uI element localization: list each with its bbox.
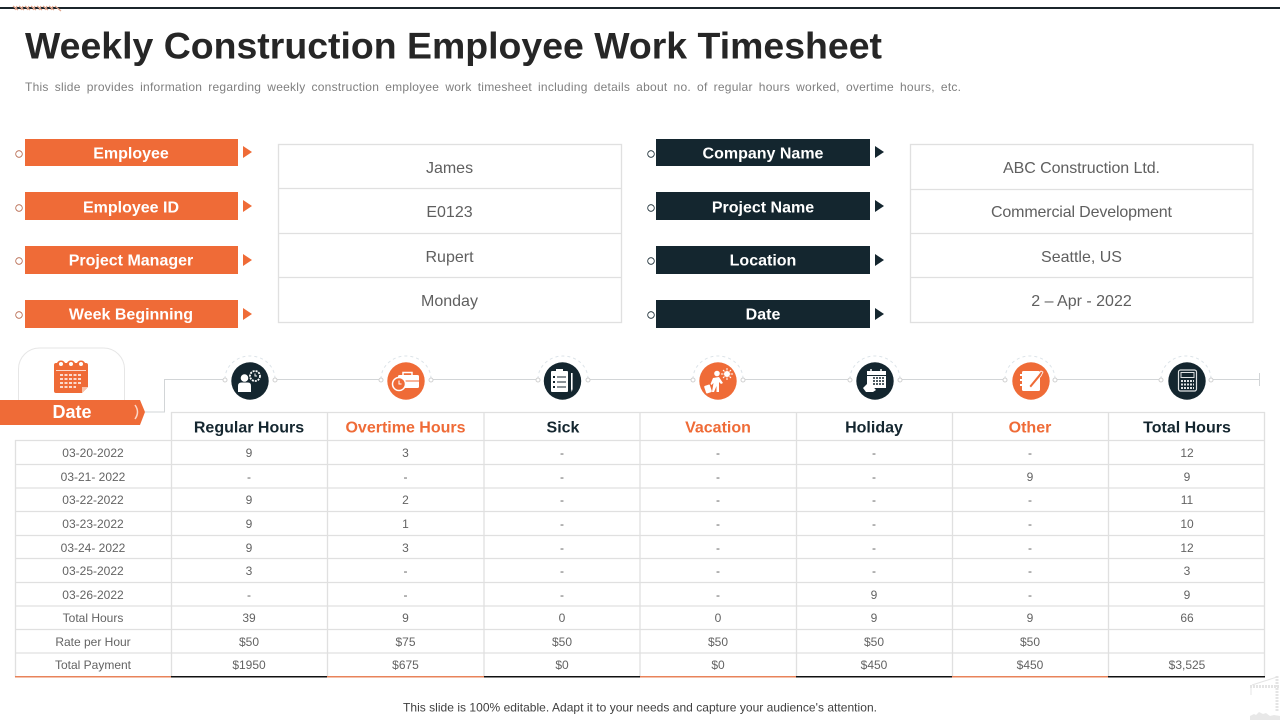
panel: company values: ABC Construction Ltd.: [1003, 160, 1160, 177]
row: 03-26-2022: [62, 588, 1191, 602]
row: 03-24-2022: -: [716, 541, 720, 555]
row: 03-26-2022: 9: [1184, 588, 1191, 602]
row: 03-26-2022: -: [1028, 588, 1032, 602]
label: Date: Date: [746, 306, 780, 324]
row: 03-21-2022: 03-21- 2022: [61, 470, 126, 484]
row: 03-25-2022: -: [716, 564, 720, 578]
row: 03-22-2022: 2: [402, 493, 409, 507]
row: 03-23-2022: -: [1028, 517, 1032, 531]
row: total payment: $450: [861, 658, 888, 672]
row: 03-20-2022: 9: [246, 446, 253, 460]
panel: company values: [910, 144, 1253, 322]
row: 03-25-2022: [62, 564, 1191, 578]
row: 03-23-2022: 10: [1180, 517, 1194, 531]
row: 03-21-2022: [61, 470, 1191, 484]
label: Company Name: [648, 139, 884, 166]
row: 03-26-2022: -: [560, 588, 564, 602]
row: 03-25-2022: -: [872, 564, 876, 578]
top rule: [0, 6, 1280, 11]
label: Location: Location: [730, 252, 796, 270]
row: rate per hour: $75: [395, 635, 416, 649]
row: rate per hour: $50: [239, 635, 259, 649]
row: total payment: $0: [555, 658, 569, 672]
row: 03-23-2022: -: [716, 517, 720, 531]
row: 03-23-2022: 03-23-2022: [62, 517, 124, 531]
column headers: [194, 420, 1231, 436]
row: total hours: 39: [242, 611, 256, 625]
row: 03-20-2022: 3: [402, 446, 409, 460]
row: 03-21-2022: -: [872, 470, 876, 484]
panel: employee values: James: [426, 160, 473, 177]
label: Company Name: Company Name: [703, 146, 824, 162]
row: 03-20-2022: [62, 446, 1194, 460]
column headers: Other: [1009, 420, 1051, 436]
row: 03-26-2022: -: [247, 588, 251, 602]
panel: employee labels: [16, 139, 252, 328]
row: 03-24-2022: 12: [1180, 541, 1194, 555]
label: Project Name: Project Name: [712, 200, 814, 216]
label: Employee: [16, 139, 252, 166]
row: 03-22-2022: -: [560, 493, 564, 507]
icon: crane watermark: [1250, 676, 1280, 720]
icon: regular hours: [223, 356, 277, 400]
row: rate per hour: Rate per Hour: [55, 635, 131, 649]
row: 03-23-2022: [62, 517, 1194, 531]
row: total hours: Total Hours: [63, 611, 123, 625]
row: 03-20-2022: -: [560, 446, 564, 460]
date banner: [0, 400, 145, 425]
label: Employee ID: Employee ID: [83, 200, 179, 216]
icon: vacation: [691, 356, 745, 400]
row: total payment: Total Payment: [55, 658, 132, 672]
row: total hours: 9: [1027, 611, 1034, 625]
label: Project Manager: Project Manager: [69, 252, 193, 270]
row: 03-21-2022: -: [560, 470, 564, 484]
row: 03-22-2022: -: [716, 493, 720, 507]
row: 03-22-2022: 11: [1181, 493, 1194, 507]
row: 03-21-2022: -: [247, 470, 251, 484]
panel: employee values: Monday: [421, 293, 478, 310]
row: 03-23-2022: -: [872, 517, 876, 531]
row: rate per hour: [55, 635, 1040, 649]
date tab card: [18, 348, 124, 402]
icon: calendar: [54, 361, 88, 393]
row: rate per hour: $50: [552, 635, 572, 649]
row: 03-26-2022: -: [716, 588, 720, 602]
row: total hours: 9: [402, 611, 409, 625]
row: 03-23-2022: -: [560, 517, 564, 531]
panel: company values: Seattle, US: [1041, 249, 1122, 266]
row: 03-21-2022: -: [404, 470, 408, 484]
row: 03-22-2022: 03-22-2022: [62, 493, 124, 507]
row: 03-22-2022: -: [872, 493, 876, 507]
column headers: Total Hours: [1143, 420, 1231, 436]
panel: employee values: [278, 144, 622, 322]
row: total payment: $450: [1017, 658, 1044, 672]
row: 03-24-2022: -: [1028, 541, 1032, 555]
subtitle: This slide provides information regarding weekly construction employee work timesheet including details about no. of regular hours worked, overtime hours, etc.: [25, 80, 961, 94]
icon: total hours: [1159, 356, 1213, 400]
label: Project Manager: [16, 246, 252, 274]
icon: overtime hours: [379, 356, 433, 400]
row: 03-24-2022: -: [872, 541, 876, 555]
panel: company labels: [648, 139, 884, 328]
column headers: Vacation: [685, 420, 751, 436]
title: Weekly Construction Employee Work Timesheet: [25, 26, 882, 66]
row: total hours: 0: [559, 611, 566, 625]
row: rate per hour: $50: [708, 635, 728, 649]
row: 03-24-2022: 3: [402, 541, 409, 555]
row: total hours: 9: [871, 611, 878, 625]
row: total payment: $0: [711, 658, 725, 672]
row: 03-24-2022: [61, 541, 1194, 555]
row: rate per hour: $50: [864, 635, 884, 649]
row: 03-21-2022: 9: [1027, 470, 1034, 484]
panel: company values: 2 – Apr - 2022: [1031, 293, 1132, 310]
row: 03-21-2022: 9: [1184, 470, 1191, 484]
column headers: Sick: [547, 420, 580, 436]
row: 03-23-2022: 1: [402, 517, 409, 531]
row: 03-22-2022: -: [1028, 493, 1032, 507]
row: 03-23-2022: 9: [246, 517, 253, 531]
connector line: [145, 373, 1260, 412]
label: Week Beginning: Week Beginning: [69, 306, 193, 324]
row: 03-21-2022: -: [716, 470, 720, 484]
column headers: Overtime Hours: [345, 420, 466, 436]
row: 03-25-2022: -: [404, 564, 408, 578]
panel: employee values: Rupert: [425, 249, 474, 266]
row: 03-22-2022: 9: [246, 493, 253, 507]
column headers: Regular Hours: [194, 420, 304, 436]
row: 03-25-2022: -: [1028, 564, 1032, 578]
row: total payment: [55, 658, 1206, 672]
row: 03-20-2022: -: [872, 446, 876, 460]
row: total payment: $3,525: [1169, 658, 1206, 672]
row: 03-26-2022: 9: [871, 588, 878, 602]
icon: other: [1003, 356, 1057, 400]
label: Location: [648, 246, 884, 274]
icon: holiday: [848, 356, 902, 400]
table bottom accents: [15, 676, 1108, 678]
label: Date: [648, 300, 884, 328]
row: 03-24-2022: 03-24- 2022: [61, 541, 126, 555]
icon: sick: [536, 356, 590, 400]
footer note: This slide is 100% editable. Adapt it to your needs and capture your audience's attention.: [403, 700, 877, 714]
date banner: Date: [52, 402, 92, 422]
row: 03-20-2022: -: [1028, 446, 1032, 460]
label: Project Name: [648, 192, 884, 220]
row: 03-24-2022: 9: [246, 541, 253, 555]
table grid: [15, 412, 1265, 677]
row: 03-22-2022: [62, 493, 1194, 507]
row: total hours: [63, 611, 1194, 625]
label: Employee: Employee: [93, 146, 169, 162]
panel: company values: Commercial Development: [991, 204, 1173, 221]
row: 03-25-2022: 3: [246, 564, 253, 578]
row: 03-20-2022: -: [716, 446, 720, 460]
row: 03-26-2022: 03-26-2022: [62, 588, 124, 602]
row: 03-24-2022: -: [560, 541, 564, 555]
row: total hours: 0: [715, 611, 722, 625]
row: total hours: 66: [1180, 611, 1194, 625]
row: rate per hour: $50: [1020, 635, 1040, 649]
column headers: Holiday: [845, 420, 903, 436]
panel: employee values: E0123: [426, 204, 473, 221]
row: 03-26-2022: -: [404, 588, 408, 602]
row: 03-20-2022: 12: [1180, 446, 1194, 460]
row: 03-25-2022: 3: [1184, 564, 1191, 578]
table: weekly timesheet: [15, 412, 1265, 677]
row: total payment: $675: [392, 658, 419, 672]
row: 03-25-2022: -: [560, 564, 564, 578]
label: Week Beginning: [16, 300, 252, 328]
row: total payment: $1950: [232, 658, 266, 672]
row: 03-20-2022: 03-20-2022: [62, 446, 124, 460]
row: 03-25-2022: 03-25-2022: [62, 564, 124, 578]
label: Employee ID: [16, 192, 252, 220]
